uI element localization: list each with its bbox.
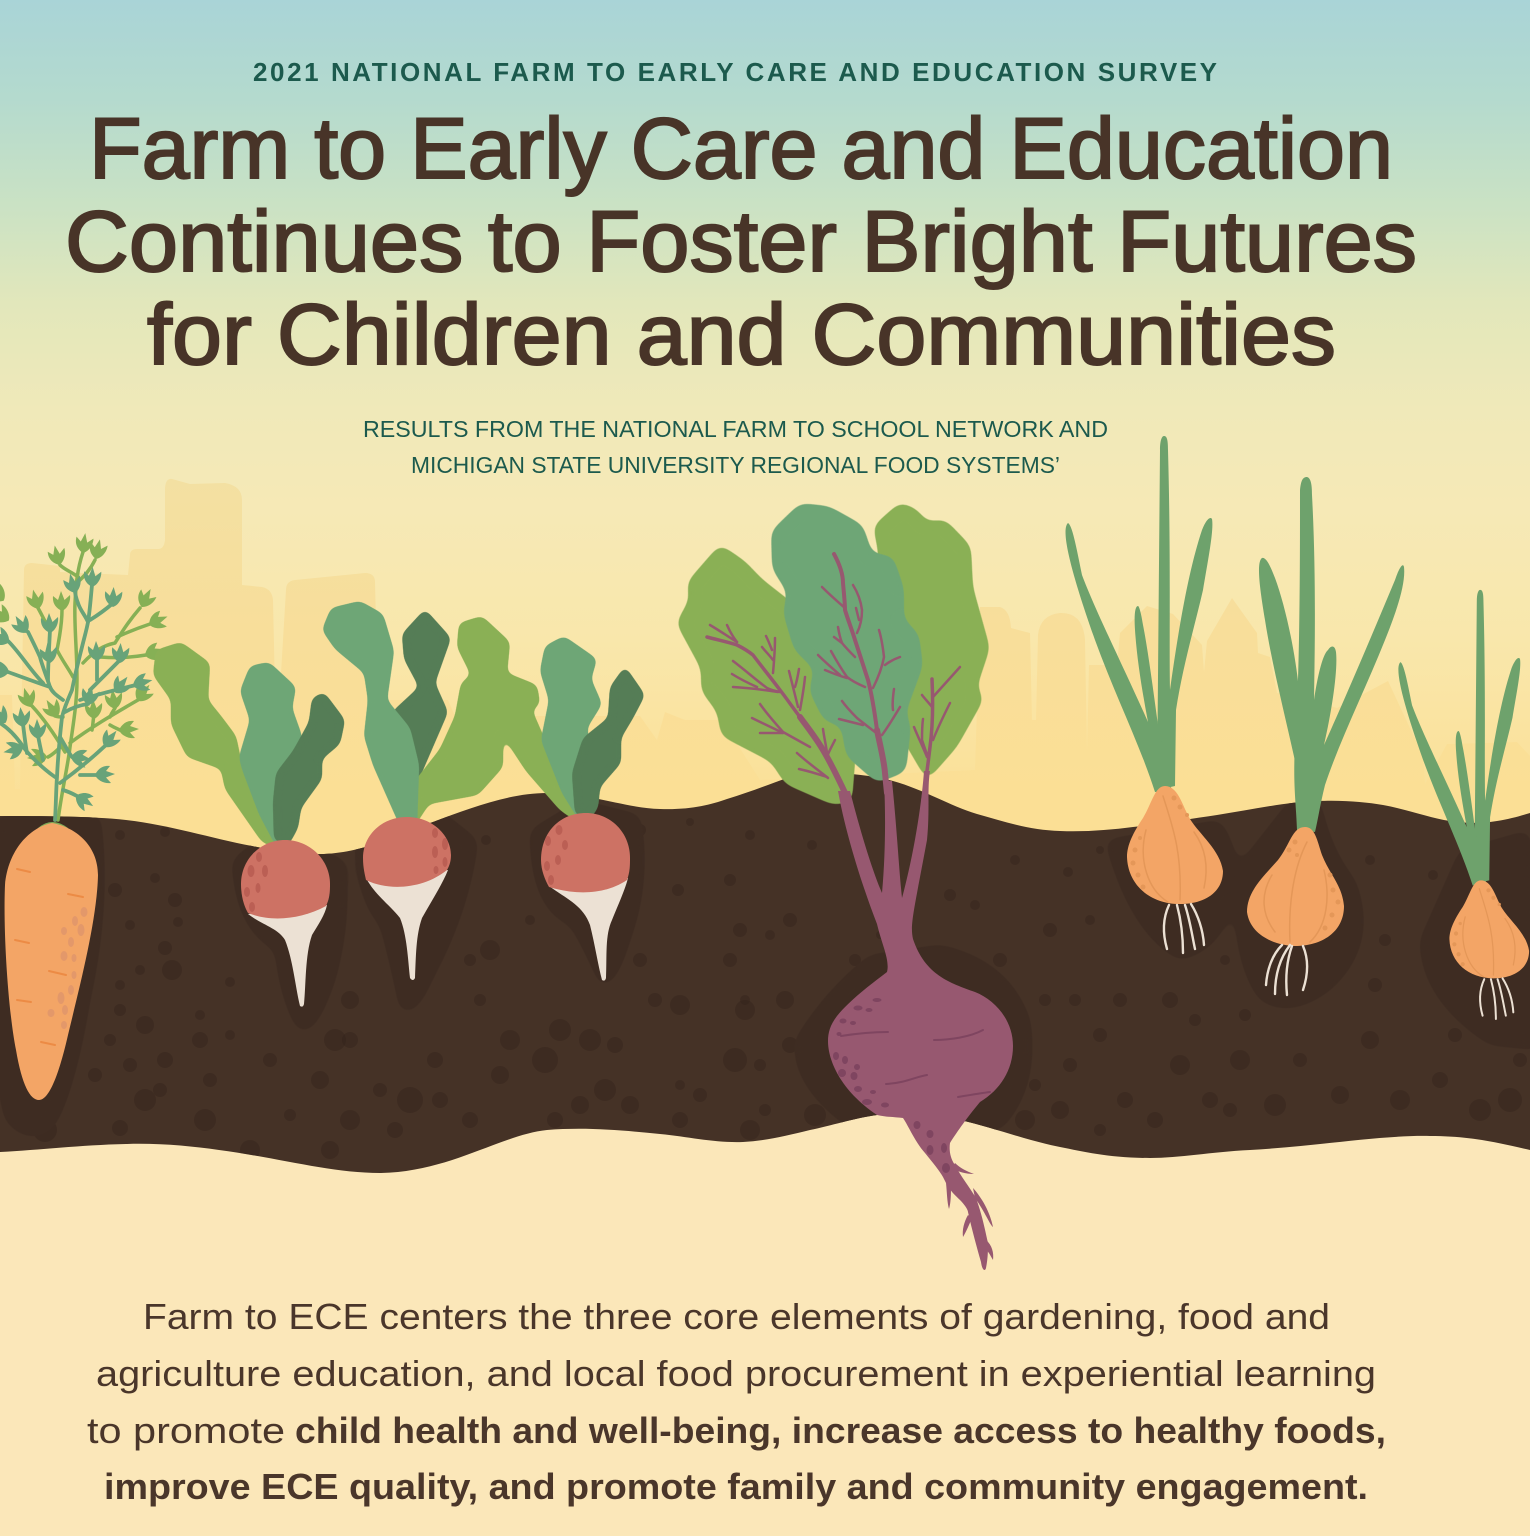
city skyline silhouette xyxy=(0,479,1530,830)
subtitle xyxy=(363,416,1108,478)
radish 2 root xyxy=(363,817,451,980)
background sand xyxy=(0,1110,1530,1536)
vegetable: beet xyxy=(676,502,1013,1270)
body description: child health and well-being, increase access to healthy foods, xyxy=(295,1410,1386,1451)
vegetable: radish 3 xyxy=(540,636,645,981)
body description: agriculture education, and local food procurement in experiential learning xyxy=(96,1353,1376,1394)
title xyxy=(65,101,1417,383)
subtitle: MICHIGAN STATE UNIVERSITY REGIONAL FOOD SYSTEMS’ xyxy=(411,452,1060,478)
onion 2 leaves xyxy=(1259,477,1404,832)
vegetable: radish 1 xyxy=(153,642,345,1007)
vegetable: onion 1 xyxy=(1066,436,1223,953)
vegetable: onion 3 xyxy=(1398,590,1529,1019)
body description: improve ECE quality, and promote family and community engagement. xyxy=(104,1466,1368,1507)
radish 1 root xyxy=(241,840,330,1007)
title: Continues to Foster Bright Futures xyxy=(65,194,1417,290)
soil speckles xyxy=(240,1000,750,1156)
dark soil halos around vegetables xyxy=(24,802,1296,1130)
beet leaves xyxy=(676,502,990,805)
radish 3 root xyxy=(541,813,630,981)
soil layer xyxy=(0,760,1530,1180)
carrot root xyxy=(5,822,98,1100)
radish 3 leaves xyxy=(540,636,645,820)
radish 1 leaves xyxy=(153,642,345,850)
body description xyxy=(87,1296,1386,1507)
beet veins xyxy=(707,554,960,800)
body description: Farm to ECE centers the three core elements of gardening, food and xyxy=(143,1296,1330,1337)
title: Farm to Early Care and Education xyxy=(89,101,1393,197)
title: for Children and Communities xyxy=(147,287,1336,383)
radish 2 leaves xyxy=(322,601,580,826)
background sky gradient xyxy=(0,0,1530,870)
vegetable: radish 2 xyxy=(322,601,580,980)
beet root xyxy=(828,771,1013,1270)
vegetable: carrot xyxy=(0,532,171,1100)
subtitle: RESULTS FROM THE NATIONAL FARM TO SCHOOL NETWORK AND xyxy=(363,416,1108,442)
vegetable: onion 2 xyxy=(1247,477,1404,995)
carrot leaves xyxy=(0,532,171,820)
onion 2 bulb xyxy=(1247,827,1344,995)
eyebrow heading: 2021 NATIONAL FARM TO EARLY CARE AND EDUCATION SURVEY xyxy=(253,57,1217,87)
body description: to promote xyxy=(87,1410,285,1451)
